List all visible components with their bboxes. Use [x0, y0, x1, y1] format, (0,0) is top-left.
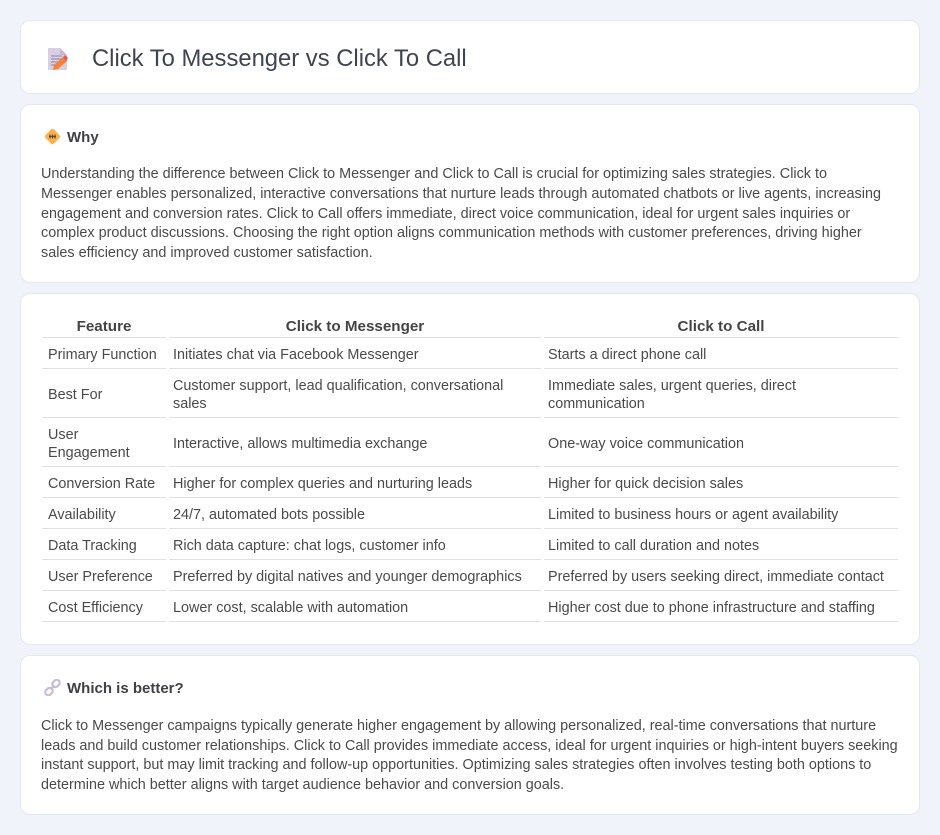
- row: user preference: [48, 569, 884, 585]
- text block: why explanation: sales efficiency and improved customer satisfaction.: [41, 245, 373, 261]
- row: conversion rate: Higher for quick decision sales: [548, 476, 743, 492]
- row: user engagement: Interactive, allows multimedia exchange: [173, 436, 427, 452]
- icon: diamond sign: [44, 128, 60, 144]
- row: conversion rate: Conversion Rate: [48, 476, 155, 492]
- row: user preference: Preferred by users seeking direct, immediate contact: [548, 569, 884, 585]
- text block: which is better explanation: determine which better aligns with target audience behavior and conversion goals.: [41, 777, 564, 793]
- row: data tracking: Data Tracking: [48, 538, 137, 554]
- table header row: Click to Call: [678, 318, 764, 335]
- table header row: Click to Messenger: [286, 318, 424, 335]
- row: user preference: User Preference: [48, 569, 153, 585]
- text block: which is better explanation: leads and build customer relationships. Click to Call provides immediate access, ideal for urgent inquiries or high-intent buyers seeking: [41, 738, 898, 754]
- row: primary function: Starts a direct phone call: [548, 347, 706, 363]
- panel: why: [20, 104, 920, 283]
- text block: why explanation: Understanding the difference between Click to Messenger and Click to Call is crucial for optimizing sales strategies. Click to: [41, 166, 827, 182]
- row: primary function: Primary Function: [48, 347, 157, 363]
- row: data tracking: [48, 538, 759, 554]
- row: best for: Best For: [48, 387, 102, 403]
- row: data tracking: Rich data capture: chat logs, customer info: [173, 538, 446, 554]
- text block: which is better explanation: instant support, but may limit tracking and follow-up opportunities. Optimizing sales strategies often involves testing both options to: [41, 757, 871, 773]
- heading: why: Why: [67, 129, 99, 146]
- row: user preference: Preferred by digital natives and younger demographics: [173, 569, 522, 585]
- text block: which is better explanation: [41, 718, 898, 793]
- table header row: Feature: [77, 318, 131, 335]
- text block: why explanation: [41, 166, 881, 261]
- row: best for: [48, 378, 796, 412]
- row: cost efficiency: Lower cost, scalable with automation: [173, 600, 408, 616]
- row: conversion rate: [48, 476, 743, 492]
- text block: why explanation: complex product discussions. Choosing the right option aligns communication methods with customer preferences, driving higher: [41, 225, 862, 241]
- icon: chain link: [44, 679, 61, 696]
- panel: title header: [20, 20, 920, 94]
- row: cost efficiency: Cost Efficiency: [48, 600, 143, 616]
- row: user engagement: [48, 427, 744, 461]
- icon: document with pencil: [48, 48, 68, 70]
- row: best for: Customer support, lead qualification, conversational: [173, 378, 503, 394]
- heading: page title: Click To Messenger vs Click To Call: [92, 45, 467, 72]
- row: primary function: Initiates chat via Facebook Messenger: [173, 347, 419, 363]
- heading: which is better: Which is better?: [67, 680, 184, 697]
- row: availability: Availability: [48, 507, 116, 523]
- row: availability: [48, 507, 838, 523]
- row: availability: 24/7, automated bots possible: [173, 507, 365, 523]
- row: user engagement: Engagement: [48, 445, 130, 461]
- row: cost efficiency: [48, 600, 875, 616]
- row: best for: communication: [548, 396, 645, 412]
- row: availability: Limited to business hours or agent availability: [548, 507, 838, 523]
- text block: which is better explanation: Click to Messenger campaigns typically generate higher engagement by allowing personalized, real-time conversations that nurture: [41, 718, 876, 734]
- row: cost efficiency: Higher cost due to phone infrastructure and staffing: [548, 600, 875, 616]
- panel: which is better: [20, 655, 920, 815]
- row: data tracking: Limited to call duration and notes: [548, 538, 759, 554]
- row: primary function: [48, 347, 706, 363]
- row: best for: sales: [173, 396, 207, 412]
- text block: why explanation: engagement and conversion rates. Click to Call offers immediate, direct voice communication, ideal for urgent sales inquiries or: [41, 206, 850, 222]
- row: conversion rate: Higher for complex queries and nurturing leads: [173, 476, 472, 492]
- row: best for: Immediate sales, urgent queries, direct: [548, 378, 796, 394]
- row: user engagement: One-way voice communication: [548, 436, 744, 452]
- text block: why explanation: Messenger enables personalized, interactive conversations that nurture leads through automated chatbots or live agents, increasing: [41, 186, 881, 202]
- row: user engagement: User: [48, 427, 78, 443]
- panel: comparison table: [20, 293, 920, 645]
- table header row: [77, 318, 764, 335]
